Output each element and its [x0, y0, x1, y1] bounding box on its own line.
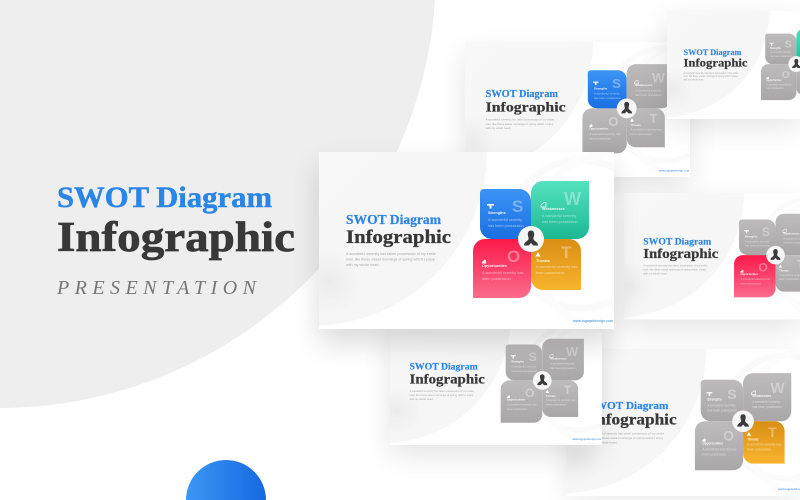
slide: top centre, strengths highlighted: has been possession [635, 93, 662, 97]
slide: main centre, full colour: A wonderful serenity [542, 214, 576, 218]
slide: right middle, opportunities highlighted: S [762, 225, 770, 239]
slide: top centre, strengths highlighted [325, 0, 762, 187]
slide: right middle, opportunities highlighted: SWOT Diagram [643, 237, 711, 247]
slide: bottom right, threats highlighted [414, 201, 800, 498]
slide: top centre, strengths highlighted: A wonderful serenity has taken possession of my entire [486, 118, 555, 122]
slide: right middle, opportunities highlighted: been possession [779, 277, 800, 281]
slide: main centre, full colour: been possession [482, 277, 510, 281]
slide: main centre, full colour: Opportunities [482, 264, 507, 268]
slide: main centre, full colour: SWOT Diagram [346, 212, 441, 227]
slide: bottom centre, all grey: with my whole heart. [410, 397, 434, 401]
slide: main centre, full colour: A wonderful serenity has taken possession of my entire [346, 252, 436, 256]
slide: top right, weaknesses highlighted: A wonderful serenity has taken possession of my entire [683, 72, 739, 75]
slide: bottom centre, all grey: T [564, 383, 572, 397]
slide: top centre, strengths highlighted: A wonderful serenity has [631, 127, 662, 131]
slide: right middle, opportunities highlighted: Opportunities [740, 272, 759, 276]
slide: top centre, strengths highlighted: been possession [589, 137, 611, 141]
slide: bottom centre, all grey: A wonderful serenity [511, 365, 537, 369]
slide: bottom right, threats highlighted: been possession [747, 447, 771, 451]
slide: bottom centre, all grey: O [525, 386, 535, 400]
slide: right middle, opportunities highlighted: soul, like these sweet mornings of spring which I enjoy [643, 268, 707, 272]
slide: top right, weaknesses highlighted: been possession [766, 88, 784, 90]
slide: bottom centre, all grey: Infographic [410, 371, 485, 386]
slide: right middle, opportunities highlighted: with my whole heart. [643, 271, 667, 275]
slide: right middle, opportunities highlighted: O [758, 261, 768, 275]
slide: bottom right, threats highlighted: A wonderful serenity has taken possession of my entire [589, 432, 664, 436]
slide: top centre, strengths highlighted: Threats [631, 123, 641, 127]
slide: right middle, opportunities highlighted: Infographic [643, 246, 718, 261]
slide: top centre, strengths highlighted: A wonderful serenity has [589, 132, 621, 136]
subheading: PRESENTATION: PRESENTATION [56, 277, 258, 299]
slide: main centre, full colour: Threats [536, 259, 550, 263]
slide: main centre, full colour: A wonderful serenity [488, 218, 522, 222]
slide: bottom centre, all grey: has been possession [550, 366, 576, 370]
slide: right middle, opportunities highlighted: A wonderful serenity has taken possession of my entire [643, 264, 708, 268]
slide: main centre, full colour: W [564, 189, 581, 209]
blue circle [186, 460, 266, 500]
slide: main centre, full colour: has been possession [542, 220, 578, 224]
slide: top right, weaknesses highlighted: Infographic [683, 58, 748, 70]
slide: right middle, opportunities highlighted: been possession [740, 281, 761, 285]
slide: bottom centre, all grey: A wonderful serenity has [507, 403, 537, 407]
slide: bottom centre, all grey: Strengths [511, 359, 525, 363]
slide: bottom right, threats highlighted: soul, like these sweet mornings of spring which I enjoy [589, 436, 664, 440]
slide: top centre, strengths highlighted: O [608, 114, 618, 129]
slide: top right, weaknesses highlighted: O [782, 70, 790, 81]
slide: bottom centre, all grey: A wonderful serenity [550, 362, 575, 366]
slide: bottom right, threats highlighted: with my whole heart. [589, 441, 618, 445]
slide: bottom right, threats highlighted: A wonderful serenity has [747, 442, 782, 446]
slide: bottom right, threats highlighted: Weaknesses [752, 394, 771, 398]
slide: bottom centre, all grey: Opportunities [507, 398, 525, 402]
slide: bottom right, threats highlighted: Threats [747, 437, 759, 441]
slide: top centre, strengths highlighted: T [650, 111, 658, 126]
slide: top centre, strengths highlighted: with my whole heart. [486, 126, 511, 130]
slide: main centre, full colour: with my whole heart. [346, 263, 380, 267]
slide: main centre, full colour: www.ingraphdesign.com [572, 319, 613, 323]
slide: bottom centre, all grey: has been possession [511, 369, 537, 373]
slide: main centre, full colour: been possession [536, 271, 564, 275]
slide: bottom centre, all grey: W [566, 344, 579, 359]
slide: main centre, full colour: A wonderful serenity has [482, 271, 523, 275]
slide: right middle, opportunities highlighted: A wonderful serenity [745, 239, 770, 243]
slide: bottom right, threats highlighted: T [768, 424, 777, 440]
slide: top right, weaknesses highlighted: has been possession [770, 56, 792, 58]
slide: bottom centre, all grey: www.ingraphdesign.com [572, 438, 601, 441]
slide: bottom right, threats highlighted: S [727, 386, 737, 402]
slide: top right, weaknesses highlighted: A wonderful serenity [770, 51, 792, 54]
slide: main centre, full colour [135, 0, 709, 343]
slide: bottom centre, all grey: A wonderful serenity has [546, 398, 576, 402]
slide: top right, weaknesses highlighted: SWOT Diagram [683, 48, 742, 57]
slide: right middle, opportunities highlighted: Weaknesses [783, 231, 800, 235]
slide: top centre, strengths highlighted: A wonderful serenity [635, 89, 662, 93]
slide: right middle, opportunities highlighted: Threats [779, 269, 789, 273]
slide: top centre, strengths highlighted: W [652, 70, 665, 85]
large grey background circle [0, 0, 436, 408]
slide: top right, weaknesses highlighted: with my whole heart. [683, 79, 704, 82]
slide: bottom centre, all grey: S [529, 350, 537, 364]
slide: bottom centre, all grey: A wonderful serenity has taken possession of my entire [410, 389, 475, 393]
slide: bottom right, threats highlighted: been possession [702, 452, 726, 456]
slide: main centre, full colour: Infographic [346, 228, 451, 248]
slide: right middle, opportunities highlighted: has been possession [745, 244, 771, 248]
slide: main centre, full colour: soul, like these sweet mornings of spring which I enjoy [346, 258, 435, 262]
slide: top centre, strengths highlighted: Infographic [486, 99, 566, 115]
slide: top centre, strengths highlighted: been possession [631, 132, 652, 136]
slide: top centre, strengths highlighted: www.ingraphdesign.com [659, 169, 690, 173]
slide: top right, weaknesses highlighted: S [785, 40, 792, 51]
slide: top centre, strengths highlighted: Weaknesses [635, 83, 653, 87]
slide: bottom centre, all grey: SWOT Diagram [410, 363, 478, 373]
slide: bottom right, threats highlighted: A wonderful serenity [752, 400, 781, 404]
slide: bottom centre, all grey: Threats [546, 394, 556, 398]
slide: top centre, strengths highlighted: S [612, 76, 621, 91]
slide: main centre, full colour: S [512, 197, 523, 216]
slide: bottom right, threats highlighted: SWOT Diagram [589, 400, 668, 412]
slide: main centre, full colour: Weaknesses [542, 207, 565, 211]
slide: top centre, strengths highlighted: Opportunities [589, 127, 609, 131]
slide: bottom right, threats highlighted: Infographic [589, 412, 677, 429]
slide: bottom right, threats highlighted: A wonderful serenity has [702, 447, 737, 451]
slide: right middle, opportunities highlighted: A wonderful serenity has [740, 277, 771, 281]
slide: top centre, strengths highlighted: has been possession [594, 96, 621, 100]
slide: top right, weaknesses highlighted: Strengths [770, 47, 782, 50]
slide: top centre, strengths highlighted: soul, like these sweet mornings of spring which I enjoy [486, 122, 554, 126]
slide: bottom centre, all grey: been possession [546, 403, 567, 407]
heading: Infographic: Infographic [57, 215, 295, 261]
slide: bottom right, threats highlighted: O [723, 427, 734, 443]
slide: bottom right, threats highlighted: A wonderful serenity [707, 403, 736, 407]
slide: bottom centre, all grey: soul, like these sweet mornings of spring which I enjoy [410, 393, 474, 397]
slide: top right, weaknesses highlighted: Opportunities [766, 79, 782, 82]
slide: right middle, opportunities highlighted [493, 66, 800, 329]
slide: right middle, opportunities highlighted: Strengths [745, 234, 758, 238]
slide: bottom right, threats highlighted: Strengths [707, 397, 722, 401]
slide: bottom right, threats highlighted: has been possession [707, 408, 737, 412]
slide: bottom right, threats highlighted: W [770, 380, 785, 397]
slide: bottom right, threats highlighted: has been possession [752, 405, 782, 409]
heading: SWOT Diagram: SWOT Diagram [57, 181, 272, 214]
slide: top right, weaknesses highlighted: A wonderful serenity has [766, 83, 792, 86]
slide: bottom centre, all grey [258, 190, 670, 455]
slide: main centre, full colour: A wonderful serenity has [536, 265, 577, 269]
slide: top centre, strengths highlighted: Strengths [594, 86, 608, 90]
slide: main centre, full colour: O [507, 247, 520, 266]
slide: main centre, full colour: T [561, 243, 572, 262]
slide: bottom centre, all grey: Weaknesses [550, 357, 567, 361]
slide: main centre, full colour: Strengths [488, 211, 506, 215]
slide: top right, weaknesses highlighted [555, 0, 800, 127]
slide: bottom right, threats highlighted: Opportunities [702, 442, 723, 446]
slide: top right, weaknesses highlighted: soul, like these sweet mornings of spring which I enjoy [683, 75, 738, 78]
slide: main centre, full colour: has been possession [488, 224, 524, 228]
slide: top centre, strengths highlighted: A wonderful serenity [594, 92, 620, 96]
slide: bottom centre, all grey: been possession [507, 407, 528, 411]
slide: top centre, strengths highlighted: SWOT Diagram [486, 89, 559, 100]
